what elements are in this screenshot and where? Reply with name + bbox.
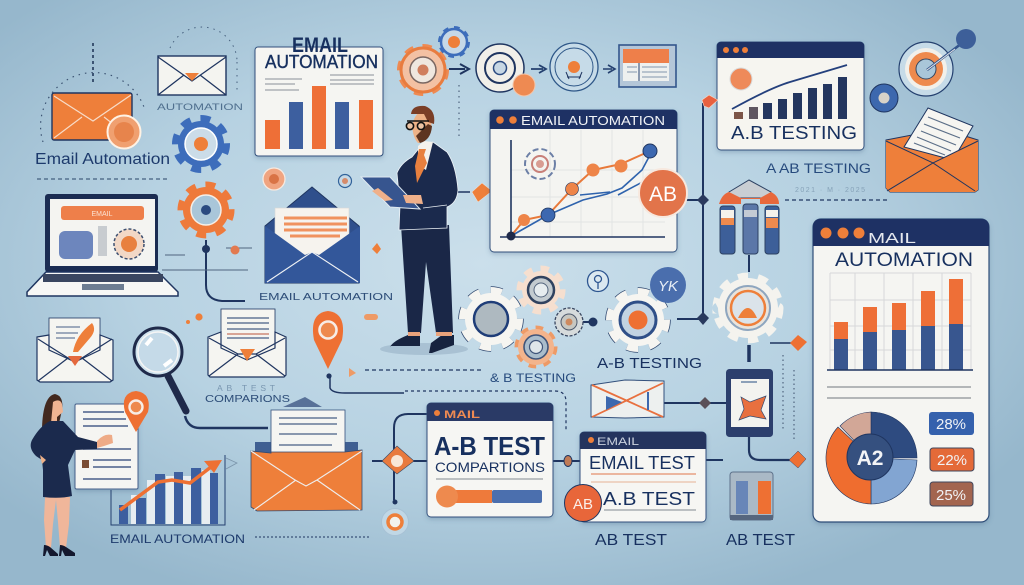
stat badges: 22% bbox=[937, 452, 967, 469]
icon: spinner bbox=[525, 149, 555, 179]
icon: open blue envelope bbox=[265, 187, 360, 283]
icon: location pin bbox=[313, 311, 343, 379]
label: Email Automation: Email Automation bbox=[35, 151, 170, 168]
glasses bbox=[407, 120, 429, 122]
figure: businessman with tablet bbox=[361, 106, 468, 355]
panel: email automation bars bbox=[255, 34, 383, 156]
badge: blue code: YK bbox=[658, 278, 679, 295]
target circle bbox=[476, 44, 524, 92]
mini window bbox=[619, 45, 676, 87]
arrow bbox=[531, 65, 546, 73]
marker: orange capsule bbox=[364, 314, 378, 320]
marker: orange arrow tip bbox=[349, 368, 356, 377]
orange gear bbox=[401, 48, 445, 92]
marker: orange pin bbox=[702, 95, 718, 108]
label: email automation: EMAIL AUTOMATION bbox=[110, 532, 245, 546]
header label: EMAIL bbox=[597, 436, 639, 448]
icon: white gear 1 bbox=[464, 292, 518, 346]
head bbox=[412, 111, 431, 143]
window dots bbox=[723, 47, 729, 53]
chart: trend bars bbox=[111, 455, 237, 525]
icon: big orange envelope bbox=[251, 397, 362, 511]
icon: target with dart bbox=[899, 29, 976, 96]
node: small capsule bbox=[564, 456, 572, 466]
stat badges: 28% bbox=[936, 416, 966, 433]
face and neck bbox=[51, 400, 63, 423]
marker: orange diamond bbox=[472, 183, 492, 202]
marker: orange diamond upper bbox=[790, 335, 807, 351]
nodes: dark diamonds on the connector bbox=[697, 194, 709, 325]
badge: AB: AB bbox=[649, 183, 677, 206]
node: lower orange circle bbox=[382, 508, 408, 536]
panel: A-B test comparisons: COMPARTIONS bbox=[435, 459, 545, 475]
axes bbox=[500, 140, 665, 237]
label: A/B test comparisons: AB TEST bbox=[217, 383, 275, 393]
icon: small gear bbox=[555, 308, 598, 336]
label: AB test right: AB TEST bbox=[726, 532, 796, 549]
header label: MAIL bbox=[444, 409, 480, 421]
heels bbox=[43, 545, 75, 556]
label: email automation: EMAIL AUTOMATION bbox=[259, 291, 393, 303]
icon: laptop bbox=[27, 194, 178, 296]
icon: white gear with orange core bbox=[718, 278, 778, 338]
progress bar bbox=[492, 490, 542, 503]
jacket bbox=[397, 142, 458, 230]
pin bbox=[124, 391, 149, 432]
label: A/B test comparisons: COMPARIONS bbox=[205, 394, 290, 405]
seal bbox=[108, 116, 140, 148]
faint caption: 2021 · M · 2025 bbox=[795, 187, 865, 194]
panel: A-B test comparisons bbox=[427, 403, 553, 517]
dress bbox=[31, 421, 97, 498]
envelope body bbox=[52, 93, 132, 140]
arrow bbox=[449, 64, 469, 74]
blue gear bbox=[441, 29, 467, 55]
legs bbox=[44, 497, 70, 548]
header text: EMAIL AUTOMATION bbox=[521, 113, 665, 128]
marker: orange dot bbox=[372, 243, 381, 254]
tablet bbox=[361, 177, 420, 209]
shoes bbox=[390, 335, 454, 353]
heading: AUTOMATION bbox=[265, 52, 378, 72]
icon: A/B bars bbox=[730, 472, 773, 520]
hair bbox=[42, 394, 62, 428]
node: orange diamond lower bbox=[789, 451, 806, 468]
icon: white gear 2 bbox=[611, 293, 665, 347]
label: A AB testing: A AB TESTING bbox=[766, 161, 871, 176]
icon: crossed envelope bbox=[591, 380, 664, 418]
heading bbox=[265, 34, 378, 72]
orbit dashed ring bbox=[41, 43, 145, 142]
node: orange diamond bbox=[382, 446, 414, 504]
hand bbox=[97, 435, 113, 448]
connector lines bbox=[37, 85, 888, 537]
workflow: gears and arrows bbox=[401, 29, 676, 96]
icon: large orange envelope with automation orbit bbox=[41, 43, 145, 148]
icon: white envelope bbox=[158, 27, 237, 95]
label: automation: AUTOMATION bbox=[157, 102, 243, 113]
icon: letter envelope center bbox=[208, 309, 286, 377]
person target bbox=[550, 43, 598, 91]
badge: blue code bbox=[650, 267, 686, 303]
legs bbox=[401, 225, 453, 333]
icon: small orange badge bbox=[263, 168, 352, 190]
label: A-B testing: A-B TESTING bbox=[597, 355, 702, 372]
icon: letter envelope left bbox=[37, 318, 113, 382]
badge: AB: AB bbox=[573, 496, 593, 513]
button label: EMAIL bbox=[91, 211, 113, 218]
panel: mail automation dashboard bbox=[813, 219, 989, 522]
label: AB test left: AB TEST bbox=[595, 532, 668, 549]
icon: cream gear bbox=[521, 270, 561, 310]
shirt and tie bbox=[418, 141, 433, 170]
orange badge bbox=[513, 74, 535, 96]
stacked bars bbox=[834, 279, 963, 370]
trend arrow bbox=[120, 467, 211, 510]
icon: orange ring gear bbox=[518, 329, 554, 365]
bars bbox=[734, 77, 847, 119]
label: and B testing: & B TESTING bbox=[490, 371, 576, 385]
stat badges: 25% bbox=[936, 487, 966, 504]
heading: MAIL bbox=[868, 230, 916, 247]
heading: A.B TESTING bbox=[731, 123, 857, 143]
icon: pillar columns bbox=[719, 180, 779, 272]
panel: mail automation dashboard: AUTOMATION bbox=[835, 250, 973, 271]
icon: blue gear bbox=[177, 120, 225, 168]
donut chart bbox=[826, 412, 917, 504]
orange series bbox=[511, 151, 650, 236]
icon: orange gear bbox=[182, 186, 240, 254]
window dots bbox=[820, 228, 832, 238]
icon: orange envelope with letter bbox=[886, 108, 978, 192]
document with pin bbox=[75, 391, 149, 489]
icon: magnifier bbox=[134, 328, 186, 411]
icon: small blue node bbox=[870, 84, 898, 112]
panel: line chart bbox=[490, 110, 677, 252]
grid bbox=[830, 273, 971, 370]
marker: orange sparks bbox=[186, 313, 203, 324]
donut chart: A2 bbox=[857, 447, 883, 470]
heading lines: EMAIL TEST bbox=[589, 453, 695, 473]
icon: small swirl bbox=[588, 270, 608, 292]
panel: email test bbox=[580, 432, 706, 522]
panel: A.B testing bbox=[717, 42, 864, 150]
heading: A-B TEST bbox=[434, 431, 545, 461]
grid bbox=[511, 130, 665, 237]
badge: AB bbox=[639, 169, 687, 217]
window dots bbox=[496, 116, 504, 124]
stat badges bbox=[929, 412, 974, 506]
badge: AB bbox=[564, 484, 602, 522]
blue series bbox=[511, 155, 670, 236]
panel: email test: A.B TEST bbox=[603, 489, 695, 509]
heading: EMAIL bbox=[292, 34, 348, 57]
icon: tablet with envelope bbox=[699, 369, 773, 437]
figure: businesswoman bbox=[31, 394, 113, 556]
label: A/B test comparisons bbox=[205, 383, 290, 405]
arrow bbox=[603, 65, 615, 73]
